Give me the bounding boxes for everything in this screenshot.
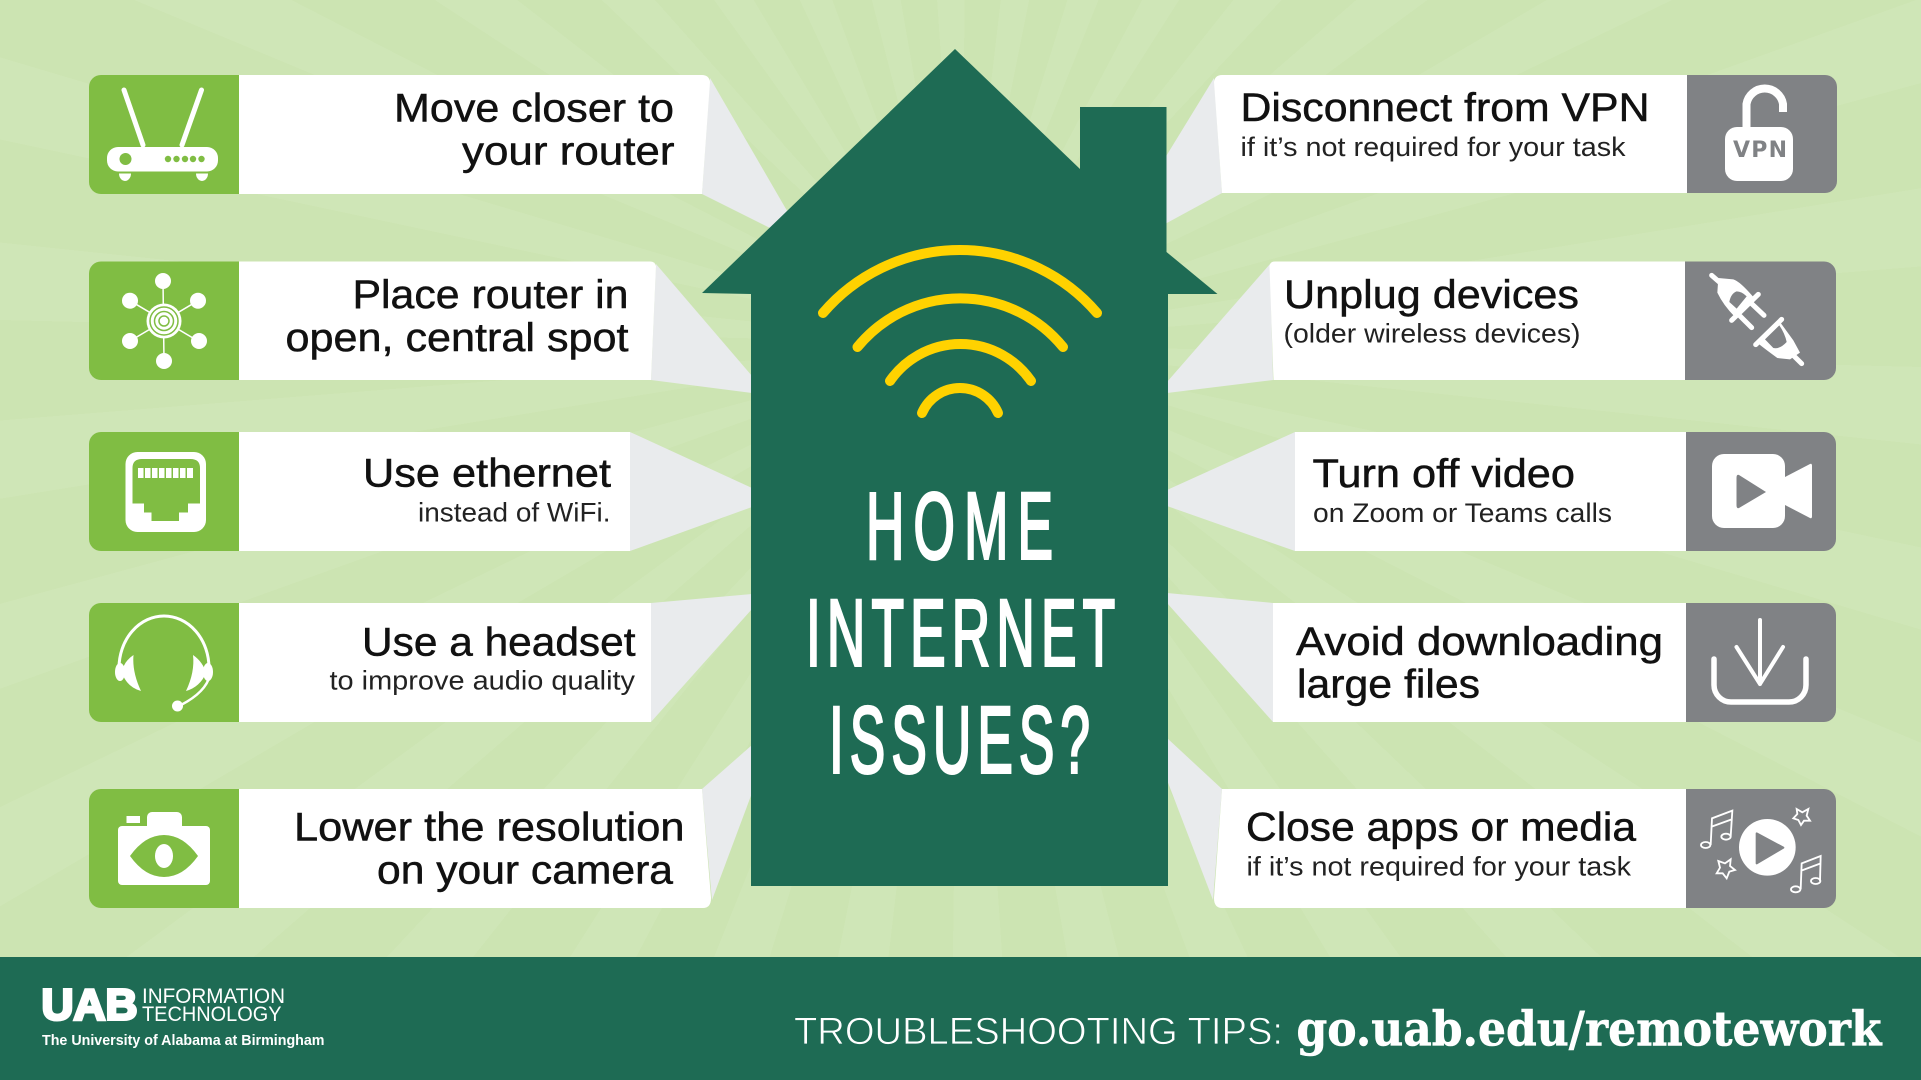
subtext: on Zoom or Teams calls (1313, 498, 1612, 528)
heading text line 2: your router (462, 130, 674, 174)
white label box (1214, 75, 1687, 193)
icon tile: video camera (1686, 432, 1836, 551)
white label box (1273, 603, 1686, 722)
icon tile: open padlock (1687, 75, 1837, 193)
heading text: Unplug devices (1284, 273, 1579, 317)
white label box (239, 262, 656, 380)
white label box (239, 75, 710, 194)
panel: turn off video (1167, 432, 1836, 551)
subtext: if it’s not required for your task (1246, 852, 1632, 882)
url: go.uab.edu/remotework (1296, 1002, 1883, 1058)
panel shadow (1167, 593, 1273, 722)
panel shadow (651, 594, 752, 722)
heading text line 2: large files (1297, 662, 1480, 706)
subtext: to improve audio quality (330, 666, 636, 696)
house with wifi and title (702, 49, 1218, 886)
panel shadow (630, 432, 752, 551)
UAB Information Technology logo: UAB (42, 980, 138, 1030)
panel: use ethernet (89, 432, 752, 551)
panel: place router in open, central spot (89, 262, 752, 393)
heading text: Turn off video (1312, 452, 1575, 496)
icon tile: ethernet port (89, 432, 239, 551)
panel: avoid downloading large files (1167, 593, 1836, 722)
icon tile: download arrow (1686, 603, 1836, 722)
heading text line 2: on your camera (377, 848, 674, 892)
heading text: Use ethernet (363, 452, 611, 496)
title: INTERNET (806, 580, 1115, 686)
title (806, 473, 1115, 793)
panel: disconnect from vpn (1165, 75, 1837, 224)
icon tile: router (89, 75, 239, 194)
panel: unplug devices (1167, 262, 1836, 393)
heading text: Lower the resolution (294, 806, 684, 850)
heading text: Disconnect from VPN (1240, 86, 1650, 130)
panel shadow (702, 78, 808, 247)
icon tile: unplugged plug (1685, 262, 1836, 380)
heading text: Avoid downloading (1296, 620, 1663, 664)
panel shadow (1167, 264, 1273, 393)
white label box (239, 603, 651, 722)
subtext: instead of WiFi. (418, 498, 610, 528)
troubleshooting tips label: TROUBLESHOOTING TIPS: (794, 1011, 1283, 1053)
panel shadow (1167, 432, 1295, 551)
subtext: if it’s not required for your task (1240, 132, 1626, 162)
title: ISSUES? (829, 687, 1090, 793)
footer band (0, 957, 1921, 1080)
panel: move closer to your router (89, 75, 808, 247)
icon tile: headset (89, 603, 239, 722)
title: HOME (866, 473, 1053, 579)
panel: lower the resolution on your camera (89, 745, 752, 908)
panel: close apps or media (1167, 738, 1836, 908)
icon tile: network hub (89, 262, 239, 380)
white label box (1214, 789, 1686, 908)
heading text: Move closer to (394, 86, 674, 130)
panel shadow (651, 264, 752, 393)
icon tile: open padlock: VPN (1733, 138, 1787, 163)
panel shadow (1165, 78, 1222, 224)
heading text: Use a headset (362, 620, 636, 664)
icon tile: camera with eye (89, 789, 239, 908)
panel shadow (702, 745, 752, 900)
panel shadow (1167, 738, 1222, 900)
white label box (1270, 262, 1685, 380)
panel: use a headset (89, 594, 752, 722)
heading text: Close apps or media (1246, 806, 1637, 850)
heading text: Place router in (352, 273, 628, 317)
subtext: (older wireless devices) (1284, 318, 1580, 348)
white label box (239, 432, 630, 551)
white label box (239, 789, 711, 908)
UAB Information Technology logo: TECHNOLOGY (142, 1003, 282, 1026)
UAB Information Technology logo: INFORMATION (142, 985, 285, 1008)
house silhouette (702, 49, 1218, 886)
heading text line 2: open, central spot (286, 316, 628, 360)
UAB Information Technology logo: The University of Alabama at Birmingham (42, 1032, 324, 1049)
icon: wifi signal arcs (823, 250, 1097, 413)
icon tile: media play with notes and stars (1686, 789, 1836, 908)
white label box (1295, 432, 1686, 551)
UAB Information Technology logo (42, 980, 324, 1049)
